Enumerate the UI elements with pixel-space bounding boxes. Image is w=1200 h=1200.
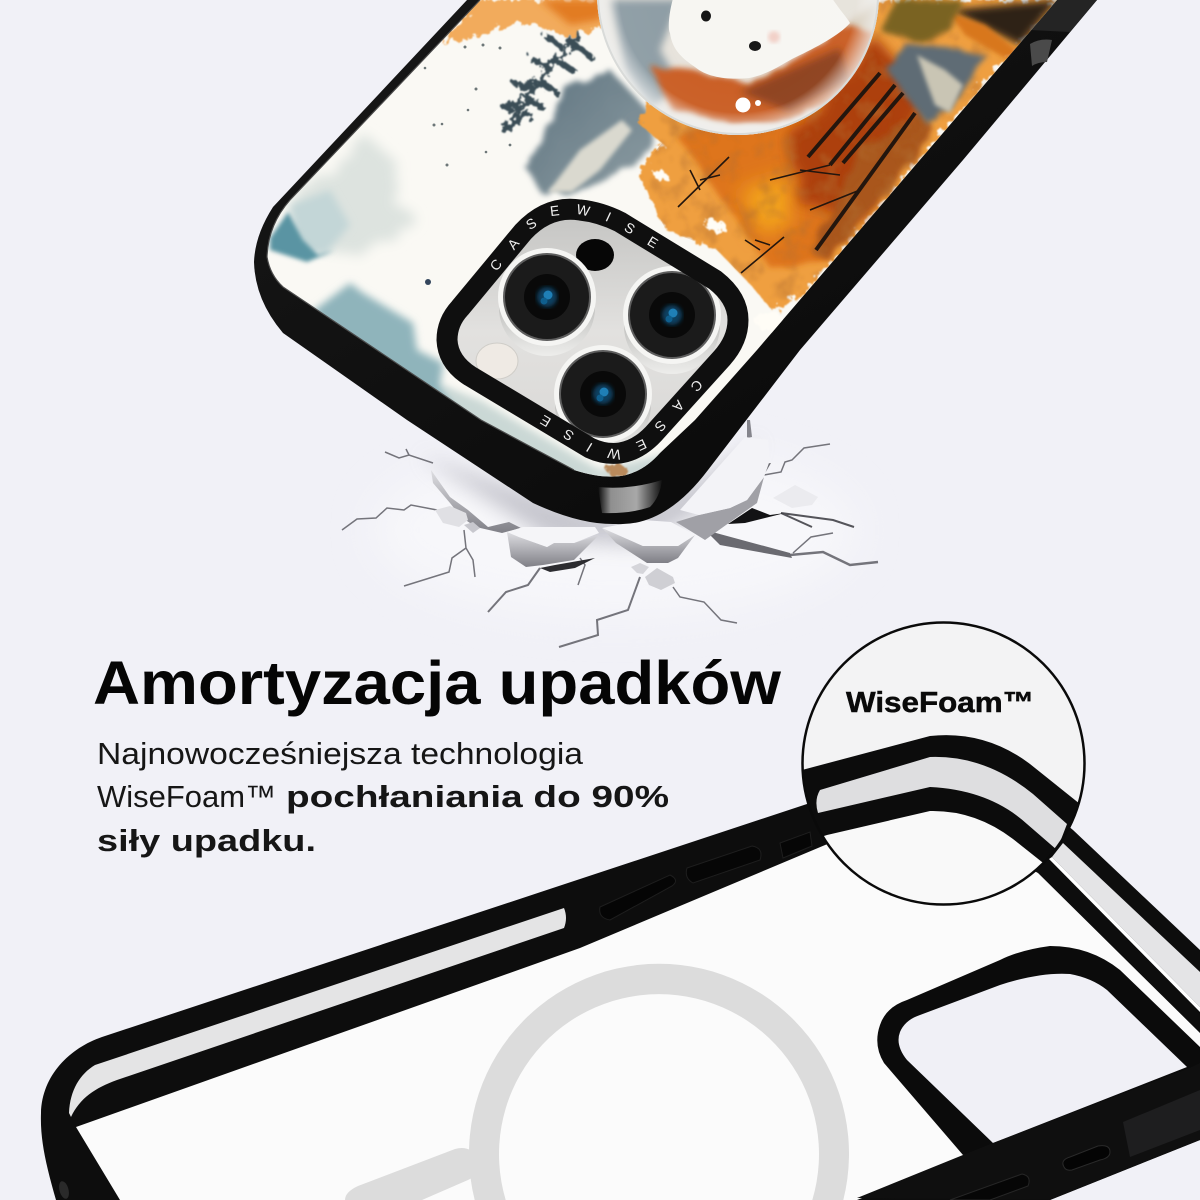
- bubble highlights: [736, 98, 750, 112]
- left shelf: [431, 470, 521, 533]
- case frame: [254, 0, 1097, 524]
- bottom button: [950, 1174, 1029, 1200]
- ghost: [669, 0, 850, 79]
- camera ring: [447, 209, 738, 453]
- artwork: autumn bright orange: [740, 175, 790, 235]
- right shelf: [676, 477, 764, 540]
- black frame: [41, 760, 1200, 1200]
- shelf tip: [737, 463, 771, 475]
- lower pill button: [1063, 1146, 1110, 1170]
- artwork: cliff highlight: [548, 120, 632, 192]
- lens 3: [554, 345, 652, 453]
- artwork: pale cloud: [290, 133, 413, 257]
- lower band: [857, 1063, 1200, 1200]
- magnified panel: [780, 811, 1047, 910]
- artwork screen: [268, 0, 1057, 477]
- debris chunks: [435, 485, 818, 590]
- upper stub crack: [747, 420, 752, 438]
- right shelf top: [680, 437, 770, 515]
- surface glow: [375, 445, 855, 615]
- camera cutout: [877, 946, 1200, 1155]
- artwork: foliage moss: [880, 0, 960, 42]
- flash: [476, 343, 518, 379]
- foam slot right: [1052, 843, 1200, 1007]
- bubble orange interior: [650, 25, 880, 128]
- right edge sheen: [1030, 0, 1097, 32]
- dark void under chunk: [540, 558, 595, 572]
- bubble rim: [708, 114, 812, 135]
- artwork: upper left foliage: [440, 0, 610, 42]
- crack lines: [342, 444, 878, 647]
- artwork: pine tree: [504, 35, 590, 130]
- side buttons upper: [600, 832, 812, 920]
- artwork: brown lower right: [810, 110, 935, 262]
- water bubble with ghost: [597, 0, 887, 140]
- artwork: orange streak: [954, 14, 1016, 60]
- ghost eye 2: [749, 41, 761, 51]
- artwork: lower teal wash: [312, 280, 460, 405]
- bottom corner highlight: [598, 480, 662, 513]
- artwork: rust spot: [606, 465, 628, 475]
- artwork: brush mottling: [630, 0, 1060, 320]
- artwork: pale rock: [917, 55, 963, 113]
- magnifier callout: [780, 622, 1090, 910]
- artwork: autumn forest base: [638, 0, 1057, 310]
- artwork: cliff: [525, 70, 654, 195]
- artwork: upper foliage orange: [540, 0, 610, 25]
- dark void: [728, 508, 785, 524]
- lower band texture: [1123, 1090, 1200, 1157]
- bottom left port: [57, 1180, 71, 1200]
- artwork: autumn deep orange: [676, 66, 860, 270]
- description: WiseFoam™: [97, 779, 276, 814]
- camera module: [436, 198, 748, 464]
- foam slot left: [69, 908, 566, 1117]
- crater and cracks: [342, 420, 878, 647]
- magnified foam: [816, 757, 1067, 850]
- artwork: paint specks: [424, 44, 511, 285]
- lens 1: [498, 248, 596, 356]
- upper phone with case: [254, 0, 1097, 524]
- title: Amortyzacja upadków: [93, 649, 782, 717]
- bubble dark interior: [740, 48, 850, 112]
- lens 2: [623, 266, 721, 374]
- artwork: blue gray rock: [888, 45, 985, 127]
- side button highlight: [1030, 40, 1052, 66]
- artwork: pale teal cloud: [290, 190, 350, 255]
- description: pochłaniania do 90%: [286, 779, 669, 814]
- artwork: teal cloud: [270, 212, 335, 262]
- lidar: [576, 239, 614, 271]
- bubble right reflection: [846, 6, 877, 52]
- artwork: lower pale wash: [442, 386, 662, 477]
- impact shadow: [420, 440, 760, 545]
- lower clear case: [41, 760, 1200, 1200]
- metal plate: [447, 209, 738, 453]
- magnifier label: WiseFoam™: [846, 687, 1034, 719]
- ghost cheek: [768, 31, 780, 43]
- magsafe ring: [469, 964, 849, 1200]
- magsafe pill: [345, 1148, 480, 1200]
- artwork: autumn red brown: [790, 40, 930, 220]
- ghost eye 1: [701, 10, 711, 22]
- artwork: white flecks: [654, 170, 784, 332]
- ring text top: CASEWISE: [491, 204, 658, 270]
- clear panel: [76, 830, 1200, 1200]
- bubble slate reflection: [610, 0, 680, 110]
- screen edge highlight: [267, 0, 574, 470]
- artwork: dark stripes upper right: [950, 0, 1057, 45]
- description: siły upadku.: [97, 823, 316, 858]
- description: [97, 736, 669, 858]
- description: Najnowocześniejsza technologia: [97, 736, 584, 771]
- magnified frame: [804, 735, 1078, 862]
- artwork: dark trees: [678, 73, 915, 273]
- ring text bottom: CASEWISE: [540, 381, 702, 460]
- wedge crack: [705, 530, 792, 558]
- foam slot highlight: [1049, 857, 1200, 1012]
